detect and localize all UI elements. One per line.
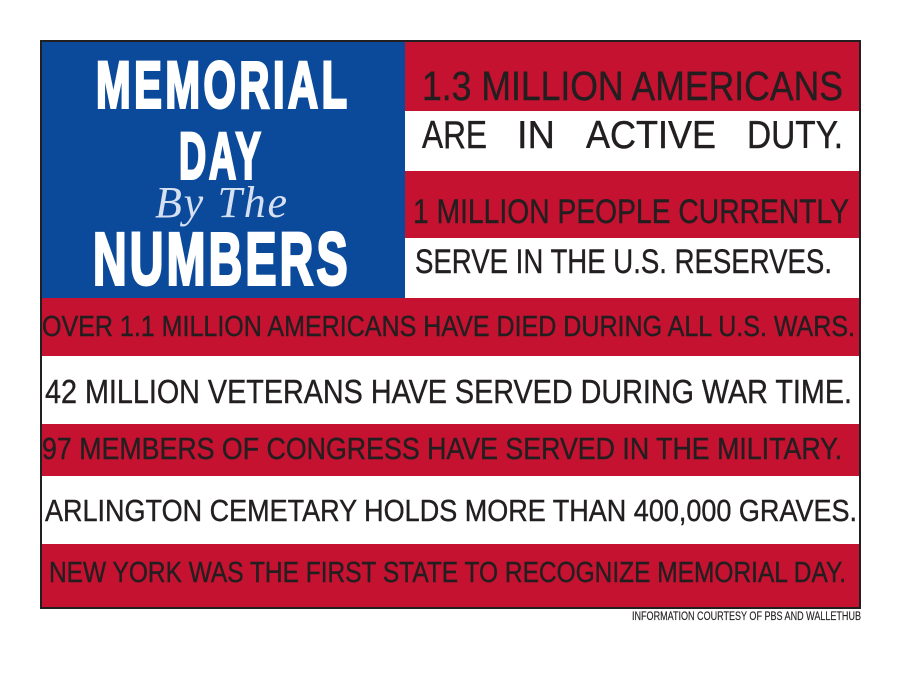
- title line: day: DAY: [179, 120, 264, 193]
- fact: active duty line one: 1.3 MILLION AMERICANS: [422, 63, 843, 109]
- panel: blue canton: [42, 42, 405, 298]
- fact: active duty line two: IN: [517, 114, 555, 157]
- title line: memorial: MEMORIAL: [96, 48, 351, 122]
- fact: active duty line two: ARE: [422, 114, 487, 157]
- fact: active duty line two: DUTY.: [747, 114, 843, 157]
- fact: active duty line two: ACTIVE: [586, 114, 716, 157]
- title: [93, 48, 351, 301]
- title line: by the: By The: [155, 178, 287, 227]
- flag background and stripes: [41, 41, 860, 608]
- title line: numbers: NUMBERS: [93, 219, 351, 301]
- flag border: [41, 41, 860, 608]
